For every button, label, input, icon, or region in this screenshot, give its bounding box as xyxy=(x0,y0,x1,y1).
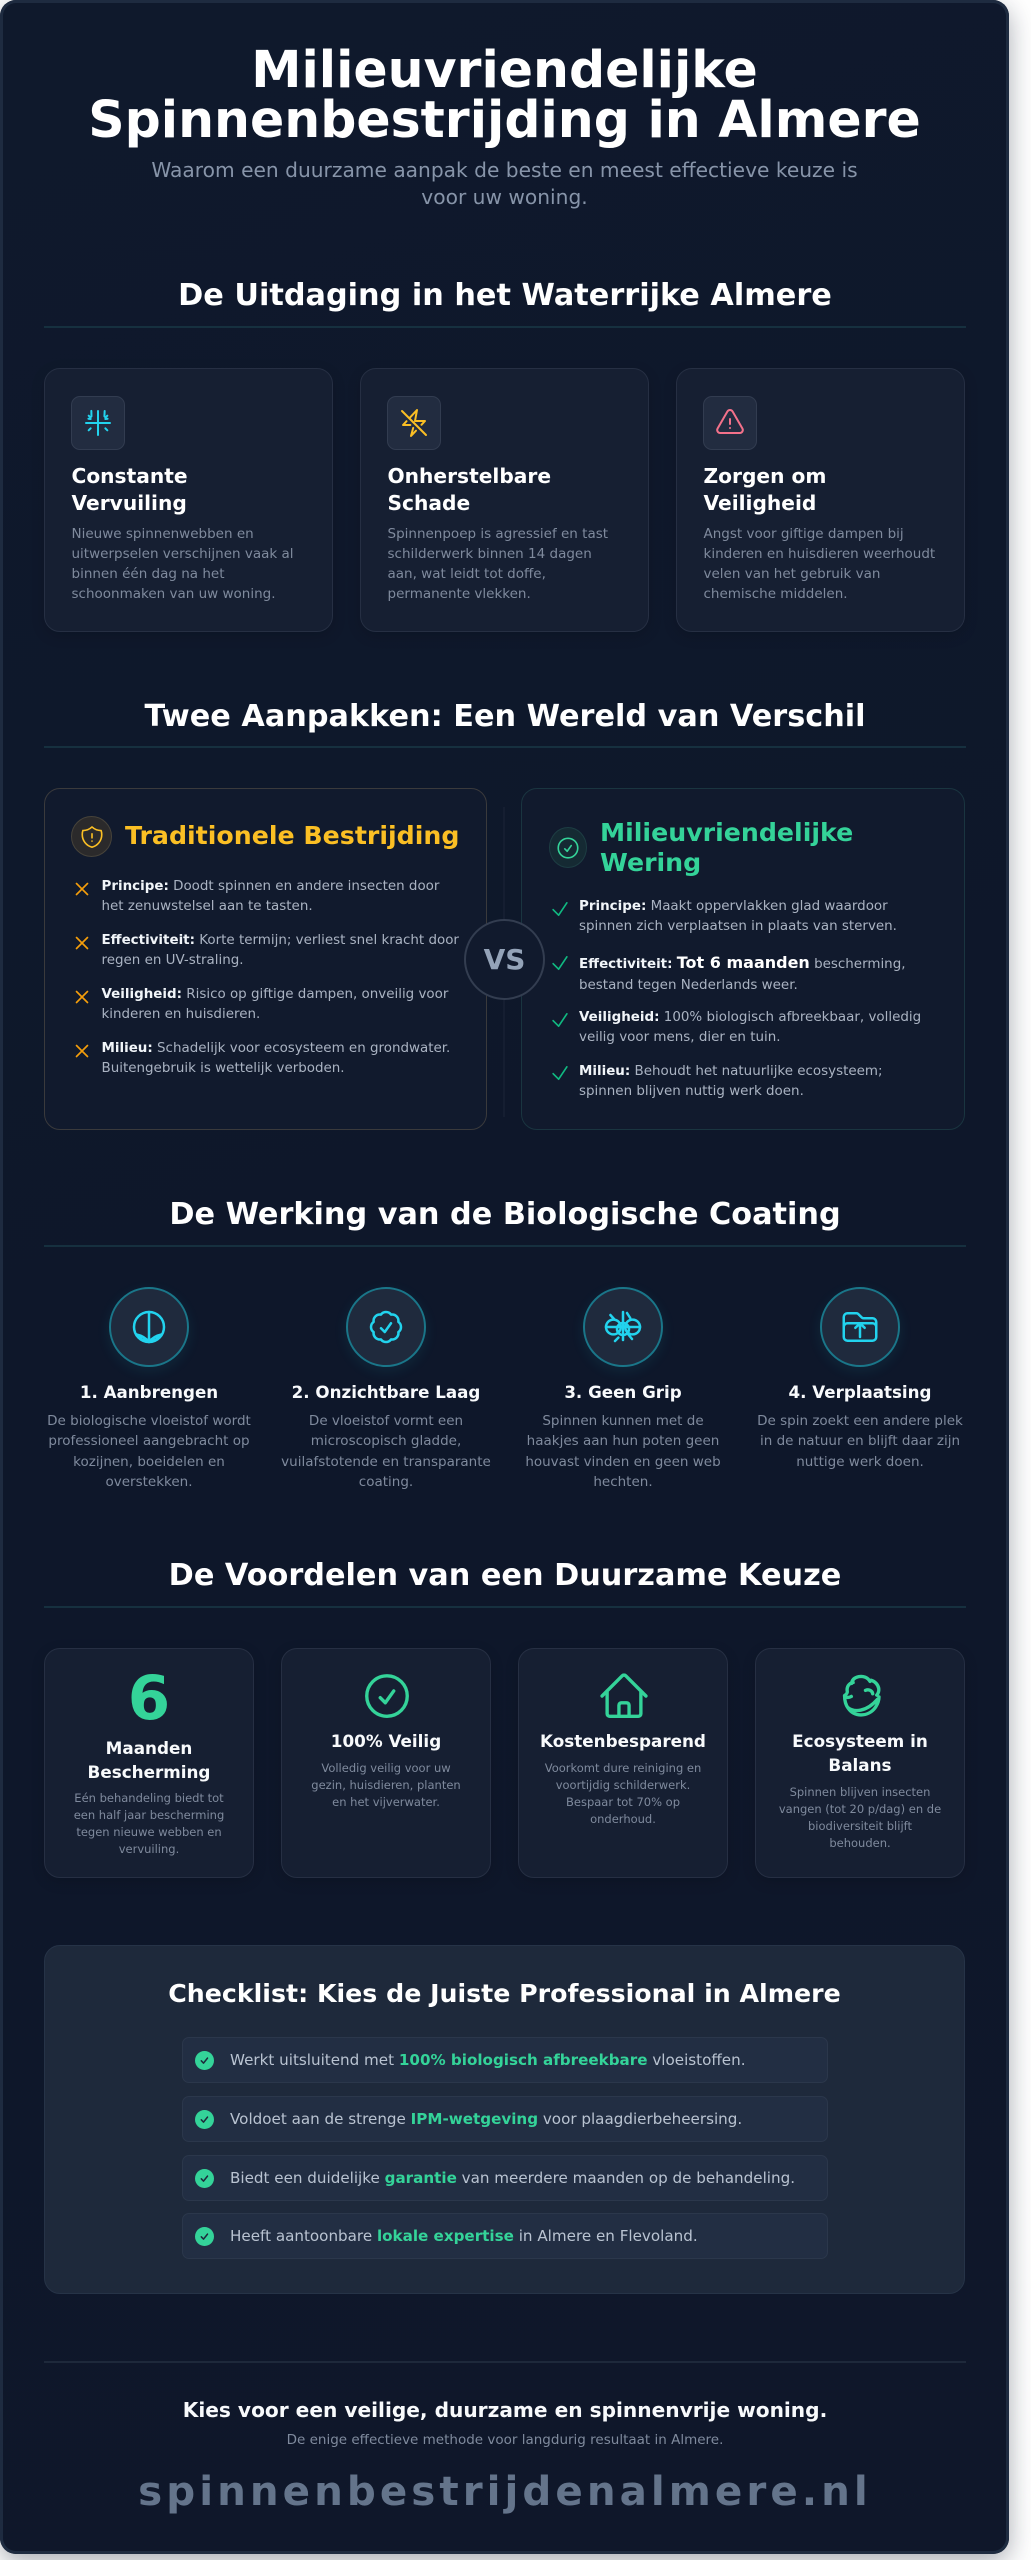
item: Veiligheid: Veiligheid: 100% biologisch afbreekbaar, volledig xyxy=(579,1010,921,1025)
item: Veiligheid: Veiligheid: Risico op giftige dampen, onveilig voor xyxy=(102,987,448,1002)
item: Milieu xyxy=(102,1041,450,1076)
panel: 100% Veilig xyxy=(281,1648,491,1878)
panel: Constante Vervuiling xyxy=(44,368,333,632)
card heading xyxy=(388,464,551,515)
icon: eco leaf globe xyxy=(834,1669,888,1723)
panel: Traditionele Bestrijding xyxy=(44,788,487,1130)
card text: chemische middelen. xyxy=(704,586,848,602)
icon: check xyxy=(552,902,568,916)
step text: Spinnen kunnen met de xyxy=(542,1413,704,1429)
step text xyxy=(525,1413,721,1490)
card heading xyxy=(704,464,826,515)
step 2 xyxy=(281,1287,491,1490)
item: Effectiviteit: bestand tegen Nederlands weer. xyxy=(579,978,798,992)
heading: De Voordelen: De Voordelen van een Duurzame Keuze xyxy=(169,1558,841,1592)
card text: Angst voor giftige dampen bij xyxy=(704,526,904,542)
step 1 xyxy=(47,1287,251,1490)
panel heading: Milieuvriendelijke xyxy=(600,818,853,847)
card text xyxy=(519,1760,727,1828)
icon: cross xyxy=(76,990,88,1004)
step heading: 4. Verplaatsing xyxy=(789,1382,931,1402)
icon: cross xyxy=(76,936,88,950)
item: Effectiviteit xyxy=(579,953,906,992)
big number 6: 6 xyxy=(128,1663,170,1734)
card text: Voorkomt dure reiniging en xyxy=(545,1761,701,1775)
item: Principe: spinnen zich verplaatsen in plaats van sterven. xyxy=(579,919,897,934)
checklist item 2 xyxy=(182,2096,828,2142)
card text xyxy=(756,1784,964,1852)
item: Principe xyxy=(102,879,440,914)
step heading: 3. Geen Grip xyxy=(564,1382,682,1402)
step text: professioneel aangebracht op xyxy=(48,1433,250,1449)
card text: Spinnen blijven insecten xyxy=(790,1785,930,1799)
card text: Nieuwe spinnenwebben en xyxy=(72,526,254,542)
item text: Voldoet aan de strenge IPM-wetgeving voor plaagdierbeheersing. xyxy=(230,2110,742,2128)
list: nadelen xyxy=(76,879,459,1076)
subtitle xyxy=(151,158,858,209)
subtitle: Waarom een duurzame aanpak de beste en meest effectieve keuze is xyxy=(151,158,858,182)
card heading: Veiligheid xyxy=(704,491,816,515)
item: Veiligheid: kinderen en huisdieren. xyxy=(102,1007,260,1022)
card text: Volledig veilig voor uw xyxy=(321,1761,451,1775)
card text: onderhoud. xyxy=(590,1812,656,1826)
card text xyxy=(45,1790,253,1858)
icon: house xyxy=(597,1669,651,1723)
step text: haakjes aan hun poten geen xyxy=(527,1433,719,1449)
icon: check xyxy=(552,956,568,970)
footer xyxy=(44,2361,966,2521)
icon: check badge xyxy=(195,2168,214,2188)
card heading: 100% Veilig xyxy=(331,1731,441,1751)
step text: kozijnen, boeidelen en xyxy=(73,1454,225,1470)
card text: en het vijverwater. xyxy=(332,1795,440,1809)
card heading xyxy=(72,464,188,515)
icon: folder arrow up xyxy=(820,1287,900,1367)
item: Effectiviteit: regen en UV-straling. xyxy=(102,953,244,968)
section: De Uitdaging xyxy=(44,278,966,632)
card heading: Schade xyxy=(388,491,470,515)
card text: Bespaar tot 70% op xyxy=(566,1795,680,1809)
card text: vangen (tot 20 p/dag) en de xyxy=(779,1802,941,1816)
card text xyxy=(388,526,608,602)
item: Milieu xyxy=(579,1064,883,1099)
step text: overstekken. xyxy=(105,1474,193,1490)
card heading: Constante xyxy=(72,464,188,488)
item: Veiligheid xyxy=(579,1010,921,1045)
card text: permanente vlekken. xyxy=(388,586,531,602)
card text: Spinnenpoep is agressief en tast xyxy=(388,526,608,542)
footer url: spinnenbestrijdenalmere.nl xyxy=(138,2467,872,2515)
step text: in de natuur en blijft daar zijn xyxy=(760,1433,960,1449)
item: Milieu: Milieu: Behoudt het natuurlijke ecosysteem; xyxy=(579,1064,883,1079)
step text xyxy=(757,1413,963,1470)
panel: Onherstelbare Schade xyxy=(360,368,649,632)
icon: check xyxy=(552,1066,568,1080)
card text: Eén behandeling biedt tot xyxy=(74,1791,224,1805)
title: Spinnenbestrijding in Almere xyxy=(88,90,921,148)
card text: binnen één dag na het xyxy=(72,566,225,582)
VS circle: VS xyxy=(484,943,525,976)
item: Veiligheid xyxy=(102,987,448,1022)
footer tagline: Kies voor een veilige, duurzame en spinnenvrije woning. xyxy=(183,2398,827,2422)
icon: check badge xyxy=(195,2226,214,2246)
icon: check xyxy=(552,1013,568,1028)
checklist item 1 xyxy=(182,2037,828,2083)
card text: velen van het gebruik van xyxy=(704,566,880,582)
panel heading: Wering xyxy=(600,848,701,877)
step text: De vloeistof vormt een xyxy=(309,1413,463,1429)
subtitle: voor uw woning. xyxy=(421,185,588,209)
icon: no grip xyxy=(583,1287,663,1367)
icon: shield xyxy=(71,816,112,857)
step heading: 1. Aanbrengen xyxy=(80,1382,218,1402)
item: Effectiviteit: Effectiviteit: Tot 6 maanden bescherming, xyxy=(579,953,906,972)
card heading: Balans xyxy=(828,1755,892,1775)
VS circle xyxy=(464,919,545,1000)
step text: houvast vinden en geen web xyxy=(525,1454,721,1470)
panel: Zorgen om Veiligheid xyxy=(676,368,965,632)
card text: behouden. xyxy=(829,1836,891,1850)
item: Milieu: Buitengebruik is wettelijk verboden. xyxy=(102,1061,345,1076)
item: Principe xyxy=(579,899,897,934)
card heading: Maanden xyxy=(106,1738,192,1758)
step text: De spin zoekt een andere plek xyxy=(757,1413,963,1429)
step text: De biologische vloeistof wordt xyxy=(47,1413,251,1429)
step 3 xyxy=(525,1287,721,1490)
item text: Heeft aantoonbare lokale expertise in Almere en Flevoland. xyxy=(230,2227,698,2245)
item: Milieu: spinnen blijven nuttig werk doen. xyxy=(579,1084,804,1099)
card text: schilderwerk binnen 14 dagen xyxy=(388,546,592,562)
item: Milieu: Milieu: Schadelijk voor ecosysteem en grondwater. xyxy=(102,1041,450,1056)
icon: web sparkle xyxy=(71,396,125,450)
card text: gezin, huisdieren, planten xyxy=(311,1778,461,1792)
item: Effectiviteit: Effectiviteit: Korte termijn; verliest snel kracht door xyxy=(102,933,459,948)
step heading: 2. Onzichtbare Laag xyxy=(292,1382,480,1402)
card text: voortijdig schilderwerk. xyxy=(556,1778,690,1792)
title: Milieuvriendelijke xyxy=(251,40,758,98)
icon: check badge xyxy=(195,2050,214,2070)
panel: 6 Maanden Bescherming xyxy=(44,1648,254,1878)
card text: aan, wat leidt tot doffe, xyxy=(388,566,546,582)
panel: Kostenbesparend xyxy=(518,1648,728,1878)
card text: tegen nieuwe webben en xyxy=(76,1825,222,1839)
card text: een half jaar bescherming xyxy=(74,1808,224,1822)
card text xyxy=(704,526,935,602)
card text xyxy=(72,526,294,602)
card text: schoonmaken van uw woning. xyxy=(72,586,276,602)
step text: vuilafstotende en transparante xyxy=(281,1454,491,1470)
icon: cross xyxy=(76,882,88,896)
panel: Checklist xyxy=(44,1945,965,2294)
card heading: Vervuiling xyxy=(72,491,187,515)
list: voordelen xyxy=(552,899,921,1099)
step 4 xyxy=(757,1287,963,1470)
card text: uitwerpselen verschijnen vaak al xyxy=(72,546,294,562)
item: Principe: het zenuwstelsel aan te tasten. xyxy=(102,899,313,914)
card text: kinderen en huisdieren weerhoudt xyxy=(704,546,935,562)
heading: De Uitdaging in het Waterrijke Almere: De Uitdaging in het Waterrijke Almere xyxy=(178,278,832,312)
step text: microscopisch gladde, xyxy=(311,1433,461,1449)
item: Principe: Principe: Doodt spinnen en andere insecten door xyxy=(102,879,439,894)
icon: check circle xyxy=(549,827,587,868)
footer subline: De enige effectieve methode voor langdurig resultaat in Almere. xyxy=(287,2432,723,2448)
step text: nuttige werk doen. xyxy=(796,1454,924,1470)
icon: warning triangle xyxy=(703,396,757,450)
card text: biodiversiteit blijft xyxy=(808,1819,912,1833)
card heading: Zorgen om xyxy=(704,464,826,488)
icon: check badge xyxy=(195,2110,214,2128)
item text: Biedt een duidelijke garantie van meerdere maanden op de behandeling. xyxy=(230,2169,795,2187)
checklist item 3 xyxy=(182,2155,828,2201)
panel heading xyxy=(600,818,853,877)
card text xyxy=(282,1760,490,1811)
icon: coating globe xyxy=(109,1287,189,1367)
step text xyxy=(47,1413,251,1490)
panel: Ecosysteem in Balans xyxy=(755,1648,965,1878)
panel: Milieuvriendelijke Wering xyxy=(521,788,965,1130)
step text: coating. xyxy=(359,1474,413,1490)
heading: De Werking: De Werking van de Biologische Coating xyxy=(169,1196,841,1232)
card heading: Bescherming xyxy=(88,1762,210,1782)
heading: Twee Aanpakken: Twee Aanpakken: Een Wereld van Verschil xyxy=(144,698,866,734)
step text: hechten. xyxy=(593,1474,653,1490)
icon: check circle xyxy=(360,1669,414,1723)
card heading: Ecosysteem in xyxy=(792,1731,928,1751)
title xyxy=(88,40,921,148)
item: Effectiviteit xyxy=(102,933,459,968)
item: Principe: Principe: Maakt oppervlakken glad waardoor xyxy=(579,899,888,914)
card heading xyxy=(45,1736,253,1784)
checklist item 4 xyxy=(182,2213,828,2259)
item: Veiligheid: veilig voor mens, dier en tuin. xyxy=(579,1030,781,1045)
icon: badge check xyxy=(346,1287,426,1367)
panel heading: Traditionele Bestrijding xyxy=(125,821,459,850)
step text xyxy=(281,1413,491,1490)
icon: cross xyxy=(76,1044,88,1058)
item text: Werkt uitsluitend met 100% biologisch afbreekbare vloeistoffen. xyxy=(230,2051,746,2069)
card heading: Onherstelbare xyxy=(388,464,551,488)
checklist heading: Checklist: Kies de Juiste Professional in Almere xyxy=(168,1979,841,2008)
card text: vervuiling. xyxy=(119,1842,179,1856)
icon: bolt slash xyxy=(387,396,441,450)
card heading xyxy=(756,1729,964,1777)
card heading: Kostenbesparend xyxy=(540,1731,706,1751)
